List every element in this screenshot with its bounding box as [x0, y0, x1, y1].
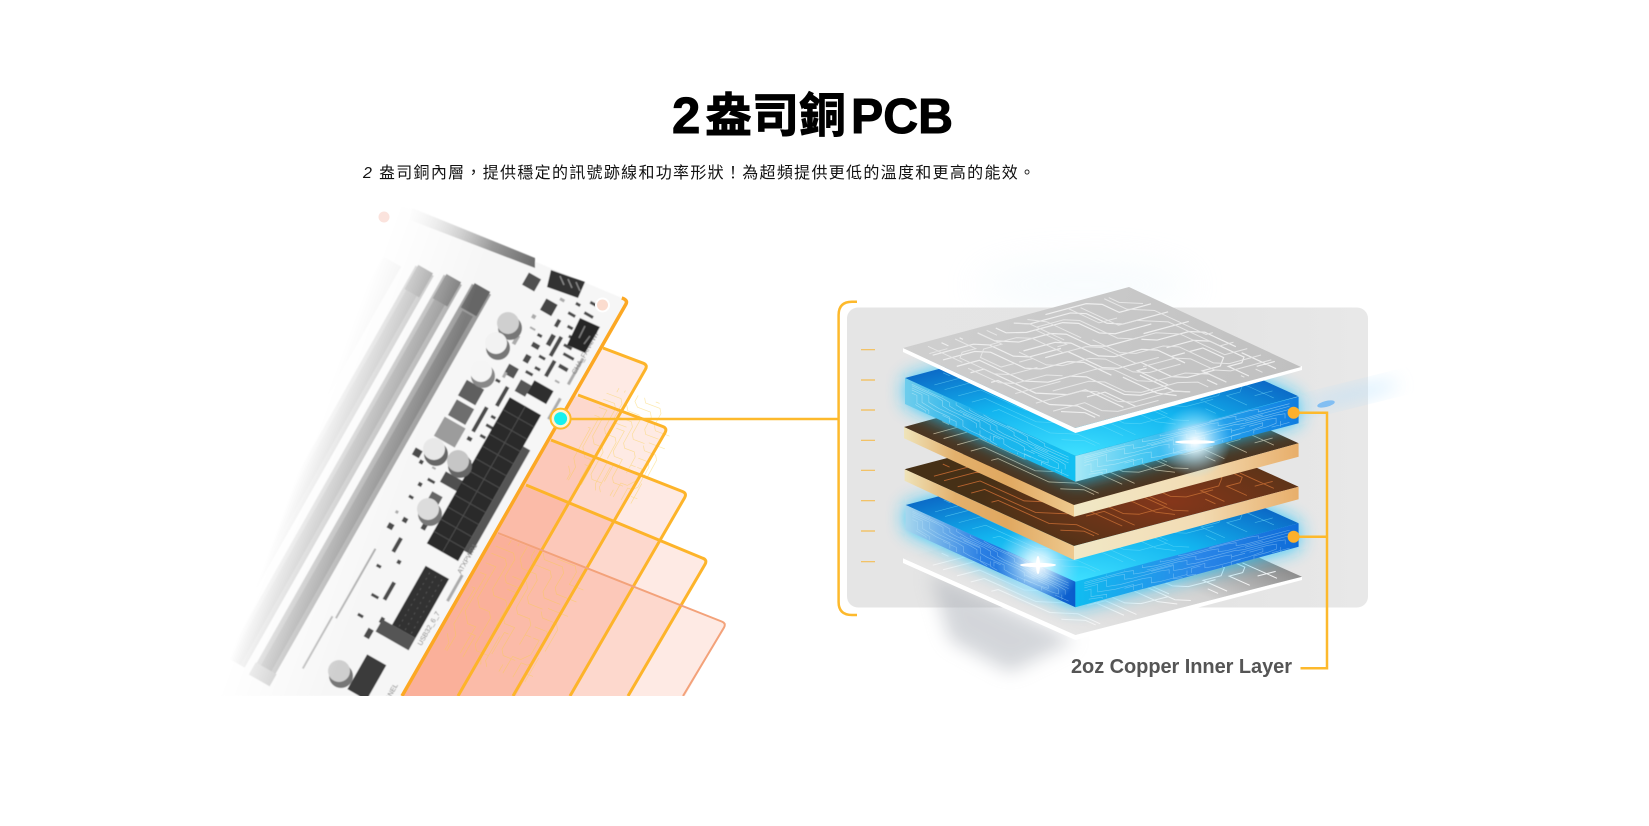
silkscreen labels: ATXPWR1	[457, 543, 479, 575]
light flare lower	[996, 523, 1080, 607]
silkscreen labels: CHA_FAN4/WP	[571, 329, 602, 376]
surface mount parts	[356, 300, 596, 640]
top silver layer	[903, 287, 1302, 433]
title: PCB	[851, 90, 953, 144]
fan header side	[567, 318, 600, 353]
silkscreen labels: USB32_6_7	[417, 611, 442, 647]
side face traces	[912, 382, 1289, 479]
lower blue glow	[905, 446, 1299, 608]
top edge strip	[426, 214, 536, 268]
upper blue glow	[905, 318, 1299, 483]
highlighted layer sheets	[402, 298, 726, 696]
upper copper layer	[904, 365, 1299, 517]
board components	[237, 264, 598, 696]
fan header top	[547, 270, 585, 298]
small chips	[428, 272, 558, 506]
stack shadow	[930, 572, 1075, 672]
grey backing panel	[847, 308, 1368, 608]
memory slots	[237, 264, 492, 686]
upper blue layer	[905, 319, 1299, 482]
board surface	[318, 247, 624, 696]
scale ticks	[861, 350, 875, 562]
ATX power connector	[427, 397, 548, 565]
side face traces	[912, 509, 1290, 603]
mounting hole	[596, 298, 609, 312]
silkscreen labels	[379, 329, 602, 713]
title: 盎司銅	[705, 89, 846, 142]
sheet outlines	[402, 298, 725, 696]
lower copper layer	[905, 410, 1299, 560]
bracket	[839, 302, 857, 615]
bottom silver layer	[903, 500, 1302, 640]
sheet fills	[402, 348, 726, 696]
callout label: 2oz Copper Inner Layer	[1071, 656, 1292, 678]
sheet circuit traces	[444, 388, 670, 682]
light flare upper	[1159, 406, 1231, 478]
connector line from board to stack	[560, 418, 838, 420]
USB header	[376, 560, 449, 650]
layer stack	[903, 287, 1302, 672]
infographic canvas	[236, 90, 1396, 696]
callout leader	[1288, 407, 1327, 668]
soft glow above stack	[975, 261, 1195, 309]
capacitors	[328, 312, 522, 688]
motherboard illustration with highlighted layers	[236, 212, 726, 696]
motherboard corner	[236, 214, 624, 696]
marker dot on board	[551, 409, 571, 429]
right side blue glow	[1300, 377, 1400, 413]
title: 2	[672, 87, 700, 144]
lower blue layer	[906, 447, 1299, 607]
faded mounting hole	[378, 212, 390, 222]
silkscreen labels: F_PANEL	[379, 682, 400, 713]
subtitle: 2 盎司銅內層，提供穩定的訊號跡線和功率形狀！為超頻提供更低的溫度和更高的能效。	[362, 164, 1036, 182]
lower connector	[347, 654, 386, 700]
